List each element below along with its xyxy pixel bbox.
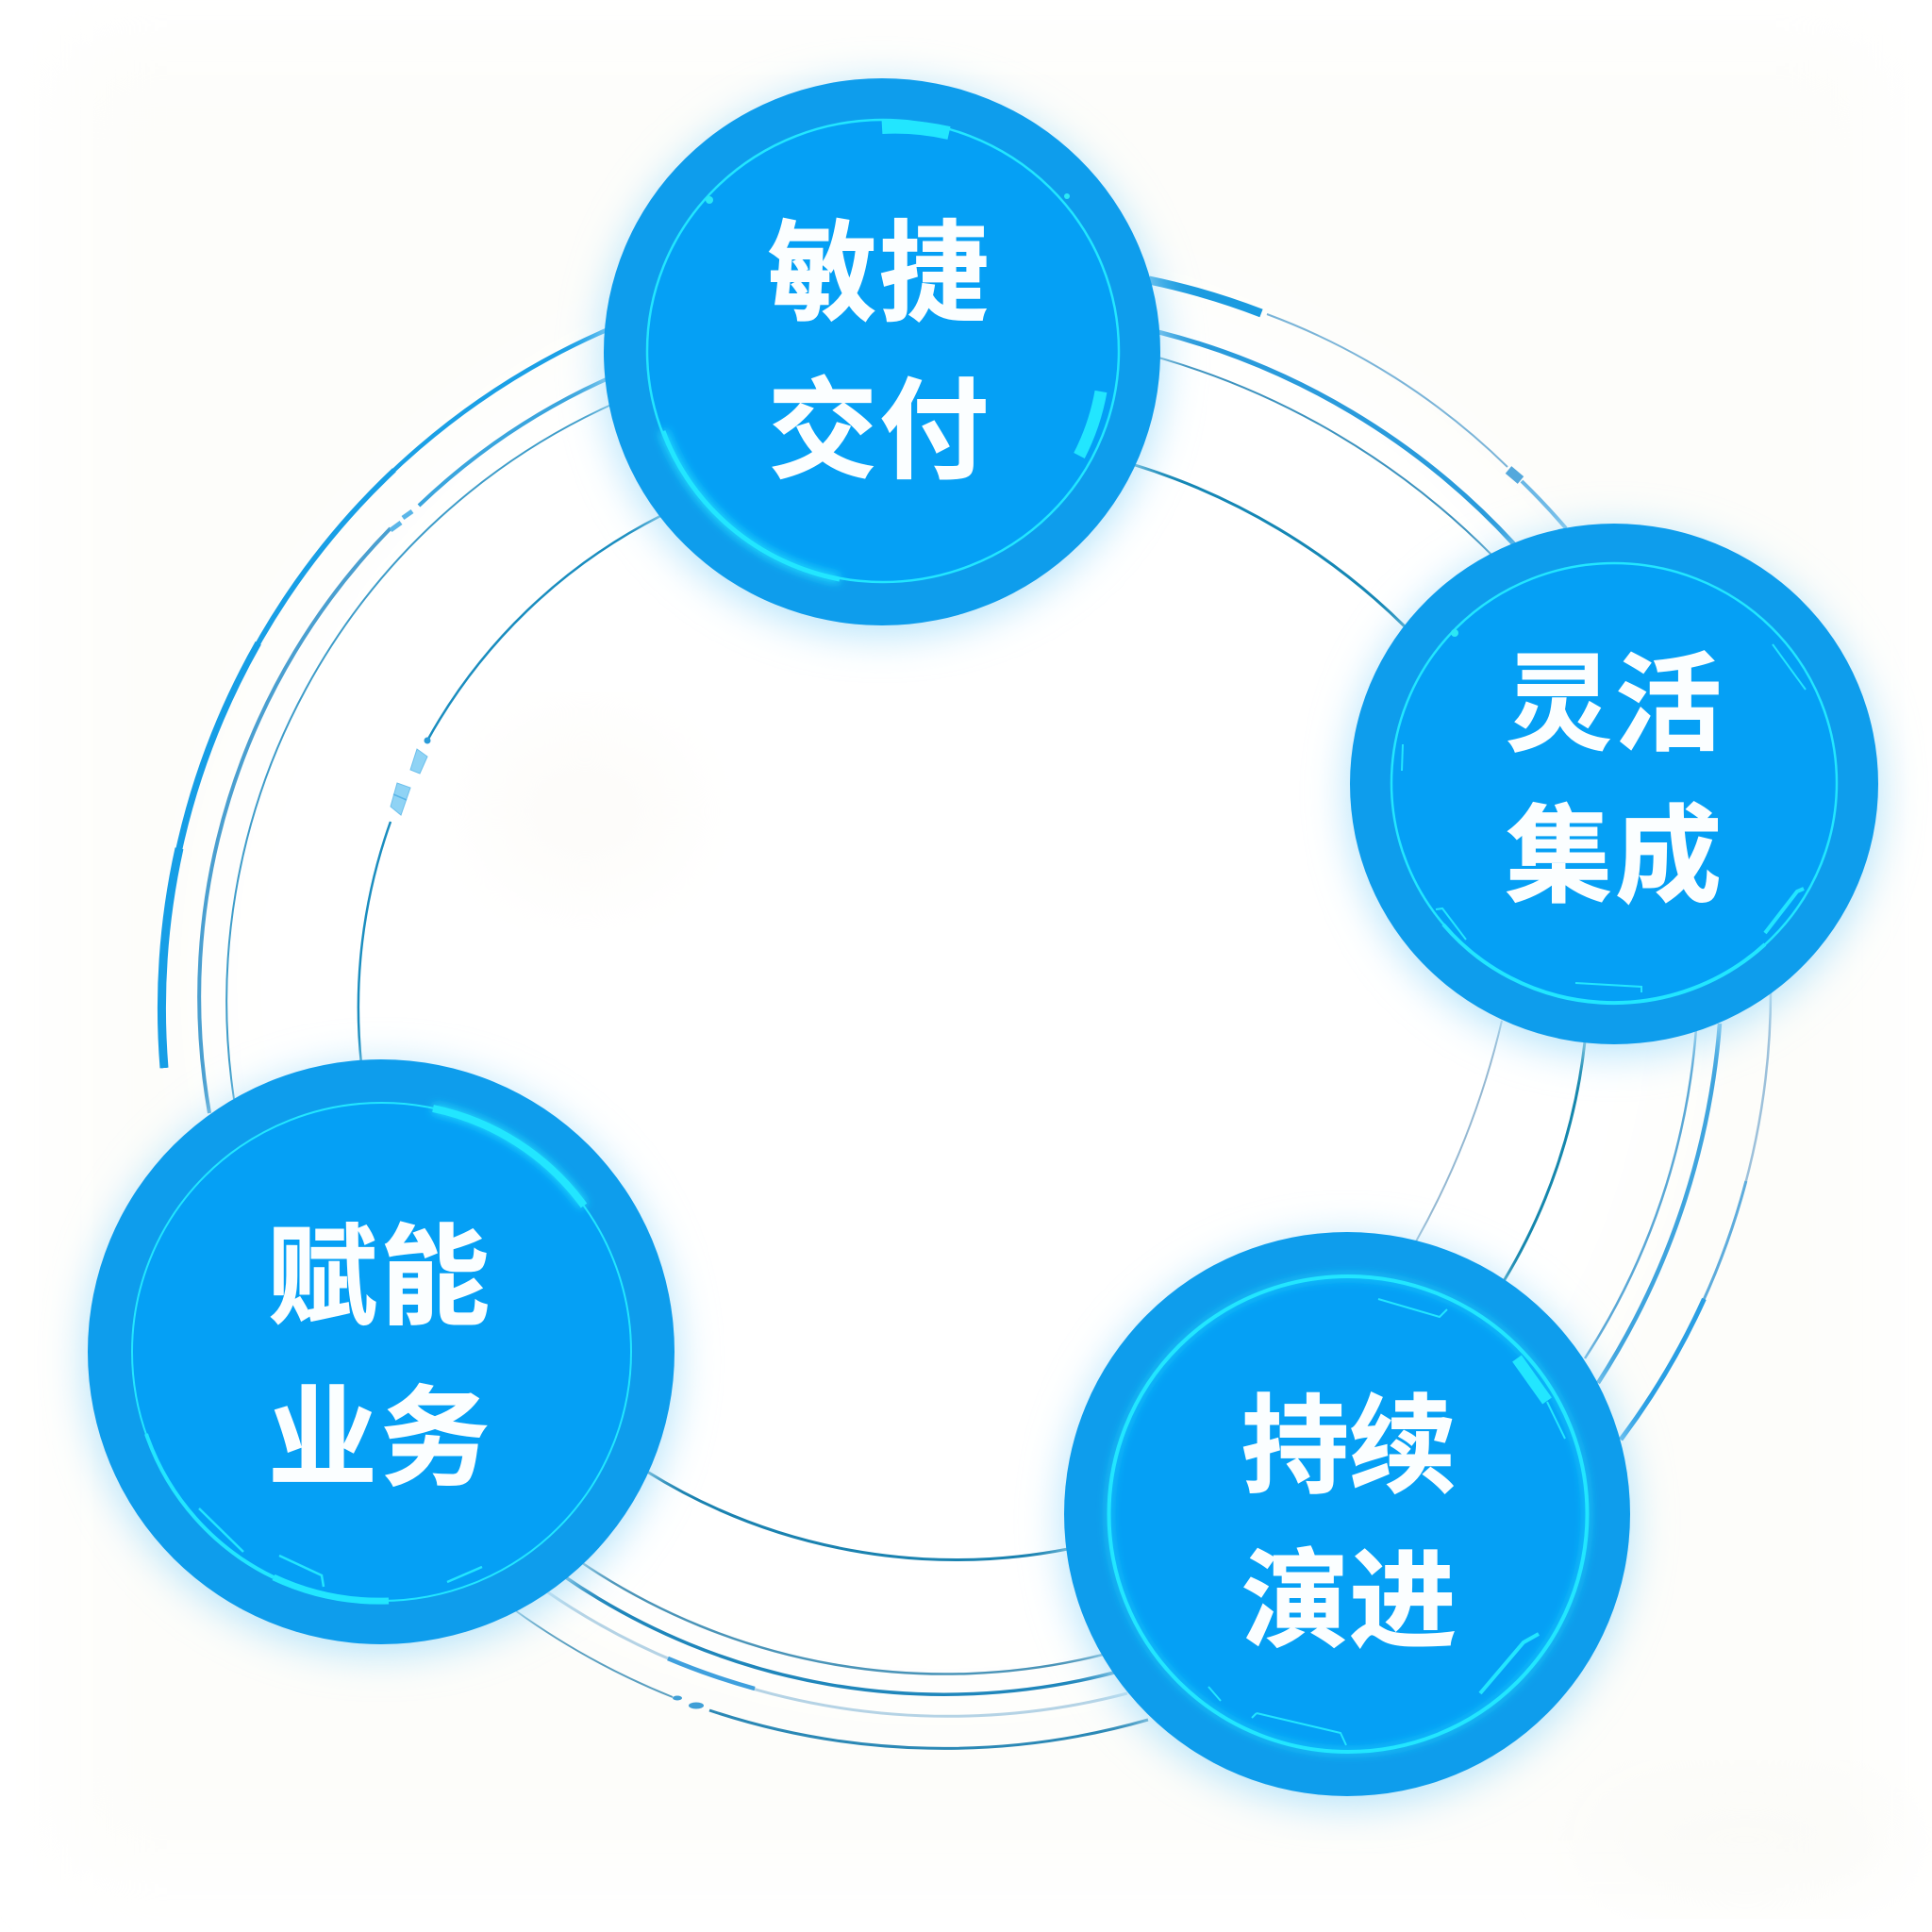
node: 敏捷交付: 交付 [768,370,991,492]
ring arcs: upper right [1132,280,1566,627]
node: 赋能业务 [87,1059,675,1653]
ring system connecting the four nodes [161,280,1771,1748]
node: 持续演进 [1063,1232,1631,1805]
disc [1064,1232,1630,1796]
disc [1350,524,1878,1044]
node: 赋能业务: 业务 [268,1377,492,1500]
neon ring [1391,563,1837,1003]
ring arcs: bottom [515,1472,1148,1748]
ring arcs: lower right [1416,991,1771,1440]
label: 赋能 [268,1216,492,1339]
node: 灵活集成 [1349,524,1879,1053]
ring arcs: upper left [161,329,660,1113]
neon ring [132,1103,631,1601]
disc [88,1059,675,1644]
ring B dash markers [391,511,412,530]
label: 敏捷 [768,212,991,335]
neon ring [1109,1276,1587,1752]
node: 敏捷交付 [603,78,1161,634]
node: 灵活集成: 集成 [1506,797,1724,916]
disc [604,78,1160,625]
node: 持续演进: 演进 [1241,1542,1457,1662]
label: 灵活 [1506,645,1724,764]
neon ring [647,120,1119,582]
inner ring glass blocks [391,738,430,815]
label: 持续 [1241,1388,1457,1507]
